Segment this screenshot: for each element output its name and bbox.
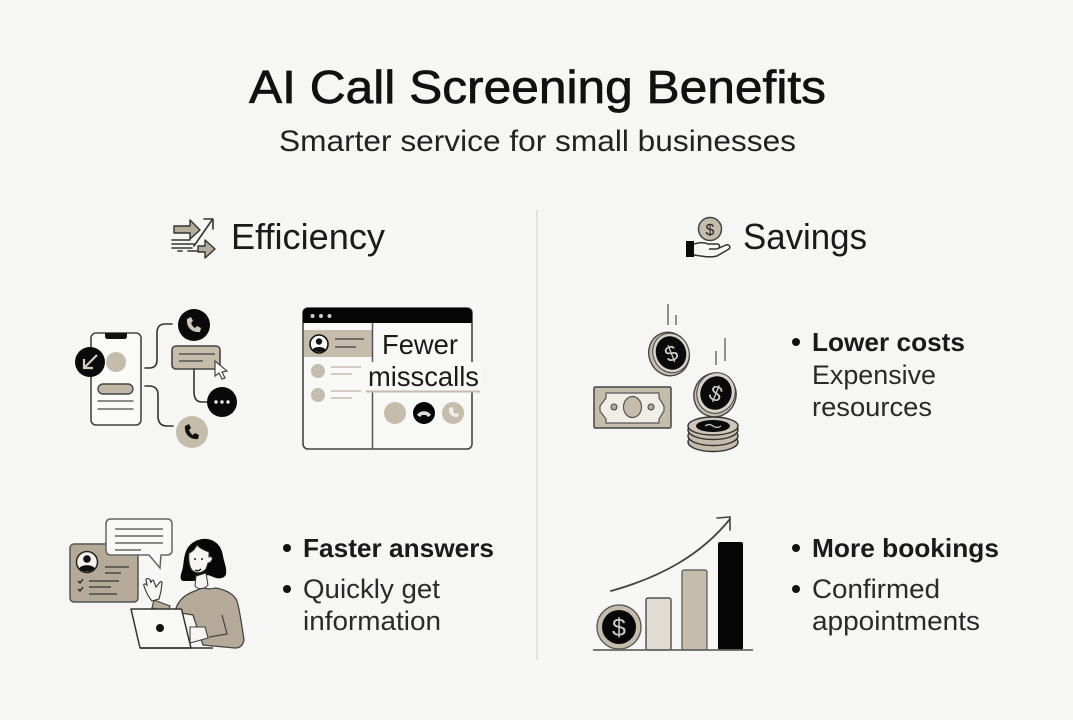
subtitle: Smarter service for small businesses (279, 125, 796, 158)
face (189, 545, 212, 573)
arm fold (209, 615, 227, 637)
text: lower costs: resources (812, 392, 932, 422)
label: fewer misscalls (368, 329, 479, 392)
text: faster answers: information (303, 606, 441, 636)
text: more bookings: appointments (812, 606, 980, 636)
heading: efficiency: Efficiency (231, 216, 385, 257)
sleeve (152, 600, 170, 612)
text: more bookings (792, 533, 999, 636)
text: lower costs: Expensive (812, 360, 936, 390)
text: faster answers (283, 533, 494, 636)
title: AI Call Screening Benefits (249, 61, 826, 113)
icon: hand with coin (686, 218, 730, 257)
label: fewer misscalls: Fewer (382, 329, 458, 360)
panel: efficiency (70, 216, 494, 648)
text: more bookings: Confirmed (812, 574, 940, 604)
text: more bookings: More bookings (812, 533, 999, 563)
hair (181, 539, 226, 581)
text: lower costs: Lower costs (812, 327, 965, 357)
laptop (131, 609, 191, 648)
icon: efficiency arrows (172, 219, 215, 258)
app window: fewer misscalls (303, 308, 481, 449)
text: faster answers: Faster answers (303, 533, 494, 563)
sweater (175, 588, 244, 648)
chart: growing bookings bars (593, 517, 753, 650)
illustration: falling coins and banknote (594, 304, 743, 452)
icon: hand with coin: $ (706, 222, 715, 239)
panel: savings (593, 216, 999, 650)
hand (144, 578, 162, 601)
icon: call routing phone diagram (75, 309, 237, 448)
label: fewer misscalls: misscalls (368, 361, 479, 392)
heading: savings: Savings (743, 216, 867, 257)
illustration: woman at laptop with chat (70, 519, 244, 648)
chart: growing bookings bars: $ (612, 614, 626, 642)
illustration: falling coins and banknote: $ (661, 340, 682, 367)
illustration: falling coins and banknote: $ (705, 380, 726, 407)
text: lower costs (792, 327, 965, 422)
text: faster answers: Quickly get (303, 574, 440, 604)
neck (195, 573, 208, 589)
